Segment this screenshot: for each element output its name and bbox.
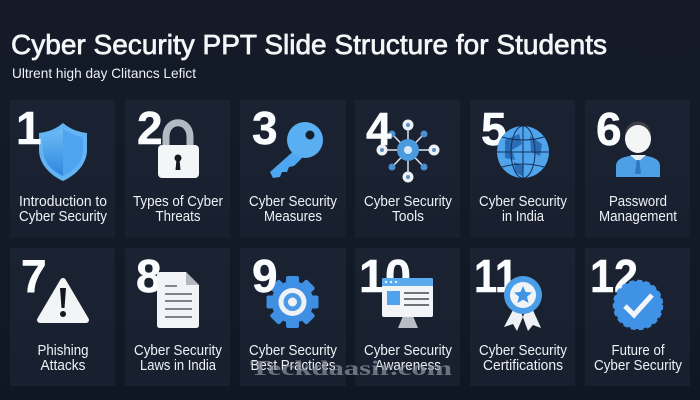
icon: document bbox=[157, 272, 199, 328]
subtitle: Ultrent high day Clitancs Lefict bbox=[12, 65, 196, 81]
label: Threats bbox=[156, 209, 200, 225]
label: Certifications bbox=[483, 358, 563, 374]
number 11: 11 bbox=[474, 250, 518, 302]
number 8: 8 bbox=[136, 250, 162, 302]
card 9: Cyber Security Best Practices bbox=[240, 248, 346, 386]
number 3: 3 bbox=[252, 102, 278, 154]
card 12: Future of Cyber Security bbox=[585, 248, 690, 386]
title: Cyber Security PPT Slide Structure for Students bbox=[11, 29, 607, 60]
label: Best Practices bbox=[250, 358, 336, 374]
label: Cyber Security bbox=[364, 194, 453, 210]
card 6: Password Management bbox=[585, 100, 690, 238]
number 9: 9 bbox=[252, 250, 278, 302]
icon: globe bbox=[497, 126, 549, 178]
label: Cyber Security bbox=[479, 343, 568, 359]
icon: warning triangle bbox=[40, 281, 86, 320]
label: Phishing bbox=[38, 343, 88, 359]
card 1: Introduction to Cyber Security bbox=[10, 100, 115, 238]
icon: gear bbox=[266, 276, 318, 328]
label: Laws in India bbox=[140, 358, 217, 374]
label: Cyber Security bbox=[249, 343, 338, 359]
number 4: 4 bbox=[366, 103, 392, 155]
number 1: 1 bbox=[16, 102, 42, 154]
card 3: Cyber Security Measures bbox=[240, 100, 346, 238]
card 4: Cyber Security Tools bbox=[355, 100, 460, 238]
label: Attacks bbox=[40, 358, 86, 374]
watermark: Teckdaasir.com bbox=[250, 356, 453, 380]
label: Cyber Security bbox=[364, 343, 453, 359]
number 7: 7 bbox=[21, 250, 47, 302]
number 10: 10 bbox=[359, 250, 411, 302]
label: Cyber Security bbox=[134, 343, 223, 359]
card 11: Cyber Security Certifications bbox=[470, 248, 575, 386]
number 12: 12 bbox=[590, 250, 638, 302]
card 5: Cyber Security in India bbox=[470, 100, 575, 238]
icon: verified badge bbox=[614, 281, 662, 329]
icon: person bbox=[616, 122, 660, 177]
card 2: Types of Cyber Threats bbox=[125, 100, 230, 238]
label: Password bbox=[609, 194, 667, 210]
icon: browser window bbox=[382, 278, 433, 328]
label: in India bbox=[502, 209, 545, 225]
label: Cyber Security bbox=[19, 209, 108, 225]
icon: network bbox=[376, 120, 440, 182]
label: Measures bbox=[264, 209, 322, 225]
card 10: Cyber Security Awareness bbox=[355, 248, 460, 386]
label: Cyber Security bbox=[479, 194, 568, 210]
card 7: Phishing Attacks bbox=[10, 248, 115, 386]
label: Introduction to bbox=[19, 194, 107, 210]
label: Types of Cyber bbox=[133, 194, 223, 210]
icon: award ribbon bbox=[504, 276, 542, 331]
icon: key bbox=[270, 122, 323, 178]
icon: shield bbox=[39, 123, 87, 181]
label: Awareness bbox=[375, 358, 441, 374]
label: Cyber Security bbox=[249, 194, 338, 210]
label: Cyber Security bbox=[594, 358, 683, 374]
card 8: Cyber Security Laws in India bbox=[125, 248, 230, 386]
label: Tools bbox=[392, 209, 424, 225]
icon: padlock bbox=[158, 123, 199, 178]
label: Future of bbox=[612, 343, 665, 359]
number 2: 2 bbox=[137, 102, 163, 154]
label: Management bbox=[599, 209, 677, 225]
number 6: 6 bbox=[596, 103, 622, 155]
number 5: 5 bbox=[481, 103, 507, 155]
